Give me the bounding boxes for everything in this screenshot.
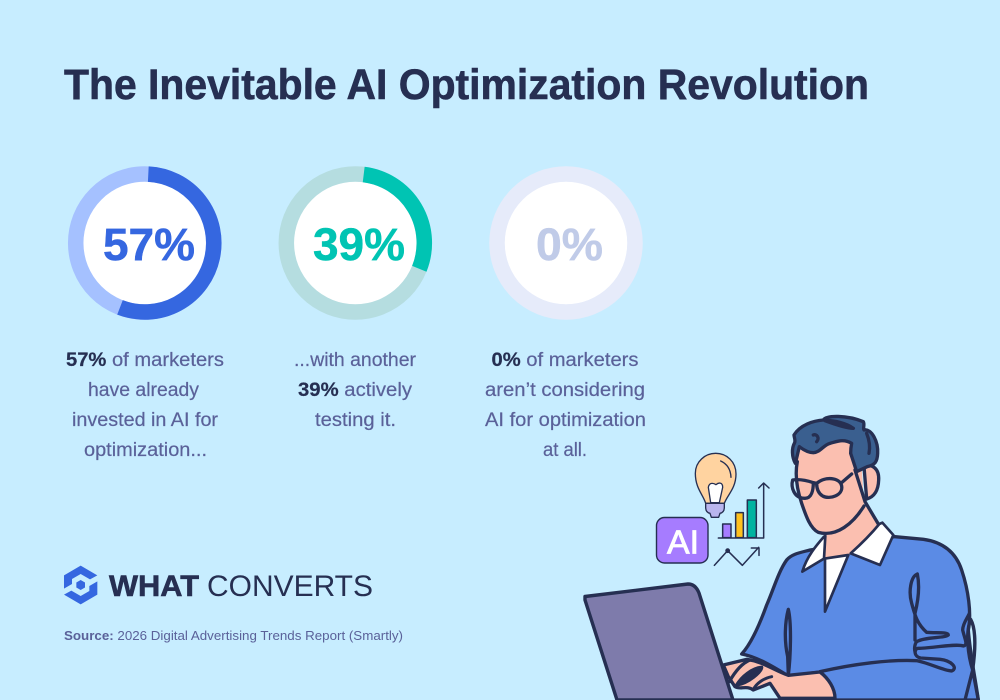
- man figure: [723, 416, 978, 700]
- donut chart: 39%: 39%: [313, 219, 405, 270]
- collar: [802, 536, 825, 572]
- icon: AI badge: [656, 518, 708, 563]
- text block: 0% not considering: AI for optimization: [485, 410, 646, 431]
- text block: 0% not considering: 0% of marketers: [492, 350, 638, 371]
- icon: bar chart with rising arrow: [714, 483, 769, 565]
- text block: 0% not considering: [485, 350, 646, 461]
- text block: 39% testing: testing it.: [315, 410, 396, 431]
- glasses: [792, 474, 852, 498]
- ear: [864, 466, 879, 499]
- text block: 57% of marketers: invested in AI for: [72, 410, 219, 431]
- sweater folds: [785, 609, 790, 675]
- laptop: [585, 584, 733, 700]
- neck and face: [797, 440, 878, 558]
- sweater: [742, 537, 978, 700]
- hand: [723, 659, 835, 698]
- text block: 57% of marketers: 57% of marketers: [66, 350, 224, 371]
- text block: 57% of marketers: optimization...: [84, 440, 207, 461]
- logo: WhatConverts: CONVERTS: [207, 570, 373, 603]
- icon: light bulb: [695, 453, 736, 517]
- donut chart: 39%: [286, 174, 424, 312]
- text block: 57% of marketers: [66, 350, 224, 461]
- text block: 39% testing: 39% actively: [298, 380, 413, 401]
- donut chart: 0%: [497, 174, 635, 312]
- icon: hexagon logo mark: [64, 566, 97, 604]
- logo wordmark: WHAT: [109, 570, 199, 603]
- hair: [792, 416, 878, 472]
- icon: AI badge: AI: [667, 524, 699, 560]
- base line of laptop: [733, 696, 835, 700]
- donut chart: 57%: [76, 174, 214, 312]
- logo: WhatConverts: [64, 566, 373, 604]
- donut chart: 0%: 0%: [536, 219, 603, 270]
- text block: 39% testing: [294, 350, 417, 431]
- donut chart: 57%: 57%: [103, 219, 195, 270]
- text block: 57% of marketers: have already: [88, 380, 200, 401]
- title: The Inevitable AI Optimization Revolution: [64, 61, 869, 109]
- source note: Source: 2026 Digital Advertising Trends Report (Smartly): [64, 629, 403, 643]
- text block: 0% not considering: at all.: [543, 440, 587, 461]
- illustration: man with laptop: [585, 416, 978, 700]
- text block: 39% testing: ...with another: [294, 350, 417, 371]
- text block: 0% not considering: aren’t considering: [485, 380, 645, 401]
